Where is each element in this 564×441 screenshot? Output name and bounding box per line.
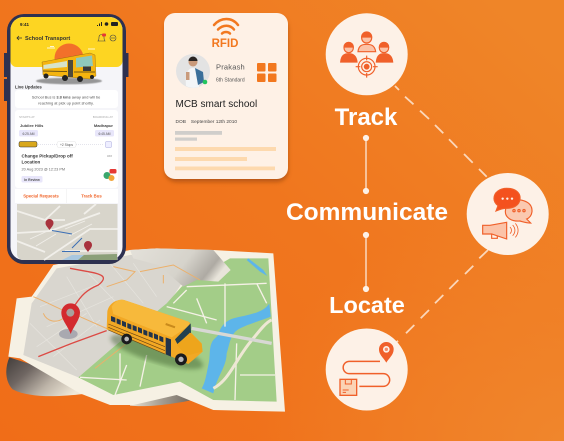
status bubbles — [104, 169, 116, 181]
heading: Communicate: Communicate — [286, 199, 448, 226]
vertical connector with dots — [364, 136, 368, 292]
phone screen — [10, 17, 122, 260]
route progress: +2 Stops — [60, 143, 73, 147]
grey placeholder bars — [175, 131, 222, 141]
student class: 6th Standard — [216, 78, 245, 84]
trip card: 6:45 AM — [98, 132, 111, 136]
icon: chat bubbles and megaphone — [483, 188, 532, 239]
school bus — [107, 300, 206, 376]
map sheet — [8, 248, 285, 412]
side buttons — [4, 53, 128, 101]
status bar — [20, 22, 118, 27]
map pins — [46, 219, 92, 252]
date of birth: DOB September 12th 2010 — [176, 119, 237, 125]
grey city zone — [23, 253, 182, 377]
map underside curl — [6, 357, 83, 396]
peach placeholder bars — [175, 147, 276, 170]
trip card: In Review — [24, 178, 40, 182]
action links: Track Bus — [81, 194, 102, 198]
rfid icon — [214, 19, 238, 34]
bell and menu icons — [98, 34, 116, 41]
green parks — [78, 258, 277, 402]
live update message: reaching at pick up point shortly. — [38, 100, 94, 106]
city texture — [30, 263, 157, 370]
trip card — [15, 110, 118, 188]
live update message — [15, 90, 118, 108]
screen title: School Transport — [25, 36, 70, 42]
trip card: Change Pickup/Drop off — [22, 154, 73, 158]
live update message: School Bus is 3.8 kms away and will be — [32, 94, 100, 100]
trip card: 20 Aug 2023 @ 12:23 PM — [22, 168, 65, 172]
locate circle — [326, 328, 408, 410]
student photo — [176, 54, 210, 88]
folded city map — [6, 248, 285, 412]
action links — [15, 189, 118, 203]
heading: Locate: Locate — [329, 292, 405, 318]
trip card: STARTS AT — [19, 115, 35, 119]
RFID card — [164, 13, 288, 182]
trip card: Location — [22, 160, 41, 164]
icon: parcel route and pin — [340, 342, 394, 395]
track circle — [326, 13, 408, 95]
action links: Special Requests — [23, 194, 59, 198]
trip card: ### — [107, 154, 112, 158]
yellow header — [10, 17, 123, 67]
student name: Prakash — [216, 62, 245, 72]
header illustration: sun and bus — [36, 44, 102, 84]
trip card: 6:25 AM — [22, 132, 35, 136]
river — [202, 303, 271, 393]
live updates heading: Live Updates — [15, 84, 42, 90]
card body — [164, 13, 288, 179]
card shadow — [165, 17, 288, 182]
small rear curl — [130, 392, 193, 406]
red route lines — [38, 268, 107, 357]
school name: MCB smart school — [176, 99, 257, 110]
map roads — [80, 283, 275, 400]
dashed connectors — [395, 86, 488, 343]
communicate circle — [467, 173, 549, 255]
rfid label: RFID — [212, 38, 238, 50]
trip card: BOARDING AT — [93, 115, 113, 119]
top fold — [130, 248, 231, 287]
icon: people and target — [341, 32, 393, 78]
phone mockup — [4, 14, 128, 264]
trip card: Jubilee Hills — [20, 123, 44, 128]
qr icon — [257, 63, 276, 82]
orange route lines — [33, 265, 200, 368]
trip card: Madhapur — [94, 123, 113, 128]
status bar: 9:41 — [20, 22, 30, 27]
mini map — [17, 204, 118, 260]
phone frame — [7, 14, 126, 264]
location pin — [59, 303, 80, 339]
heading: Track: Track — [335, 104, 398, 131]
